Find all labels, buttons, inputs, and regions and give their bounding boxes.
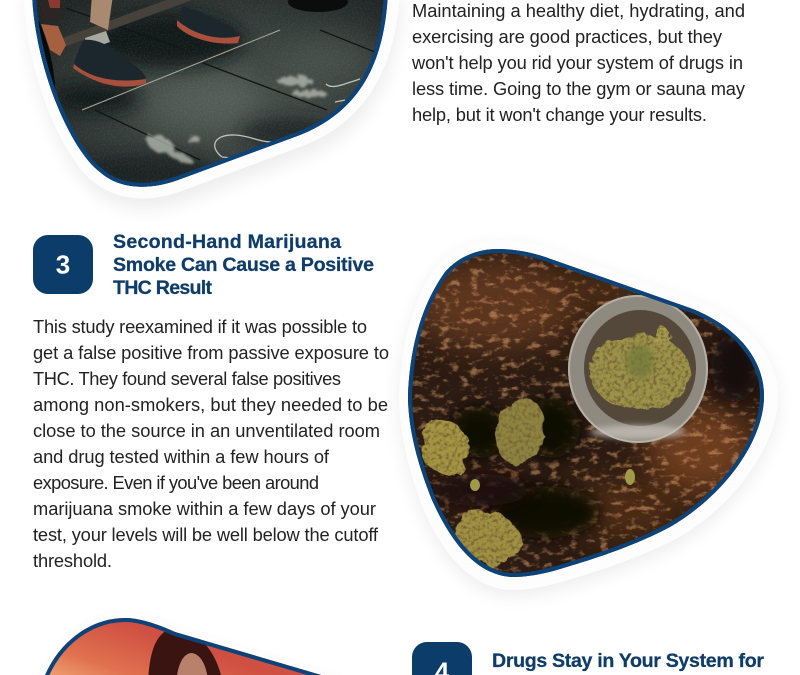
text block: fact 2 body <box>411 0 746 125</box>
text block: fact 3 body: exposure. Even if you've been around <box>33 472 319 493</box>
card shadow <box>399 246 778 596</box>
text block: fact 2 body: less time. Going to the gym or sauna may <box>412 78 746 99</box>
photo border <box>40 618 345 675</box>
photo border <box>32 0 388 187</box>
cannabis photo <box>408 249 764 577</box>
heading: fact 3: THC Result <box>113 277 212 299</box>
number badge 3 <box>33 235 93 294</box>
photo card: woman on red background <box>45 618 321 675</box>
bud middle <box>494 398 546 467</box>
card white halo <box>23 0 400 198</box>
text block: fact 3 body: among non-smokers, but they needed to be <box>33 394 388 415</box>
text block: fact 2 body: help, but it won't change your results. <box>412 104 707 125</box>
heading: fact 3: Second-Hand Marijuana <box>113 231 342 253</box>
text block: fact 3 body: get a false positive from passive exposure to <box>33 342 389 363</box>
card white halo <box>399 240 778 590</box>
text block: fact 3 body: test, your levels will be well below the cutoff <box>33 524 379 545</box>
text block: fact 3 body: threshold. <box>33 550 112 571</box>
text block: fact 3 body: and drug tested within a few hours of <box>33 446 330 467</box>
text block: fact 3 body: This study reexamined if it was possible to <box>33 316 367 337</box>
number badge 4 <box>412 642 472 675</box>
card white halo <box>30 609 360 675</box>
bud lower <box>455 508 524 568</box>
heading: fact 4: Drugs Stay in Your System for <box>492 650 764 672</box>
glass jar <box>568 295 708 443</box>
photo border <box>408 249 764 577</box>
heading: fact 3: Smoke Can Cause a Positive <box>113 254 374 276</box>
text block: fact 3 body <box>33 316 389 571</box>
number badge 3: 3 <box>56 250 70 280</box>
text block: fact 3 body: THC. They found several false positives <box>33 368 341 389</box>
text block: fact 2 body: Maintaining a healthy diet, hydrating, and <box>412 0 745 21</box>
text block: fact 3 body: close to the source in an unventilated room <box>33 420 380 441</box>
photo card: cannabis buds in jar <box>399 240 780 596</box>
photo card: gym deadlift <box>20 0 402 209</box>
card shadow <box>26 0 402 209</box>
gym photo <box>32 0 388 187</box>
woman photo <box>45 618 321 675</box>
heading: fact 3 <box>113 231 374 299</box>
text block: fact 2 body: exercising are good practices, but they <box>412 26 723 47</box>
text block: fact 2 body: won't help you rid your system of drugs in <box>411 52 743 73</box>
bud left <box>421 419 470 476</box>
text block: fact 3 body: marijuana smoke within a few days of your <box>33 498 376 519</box>
